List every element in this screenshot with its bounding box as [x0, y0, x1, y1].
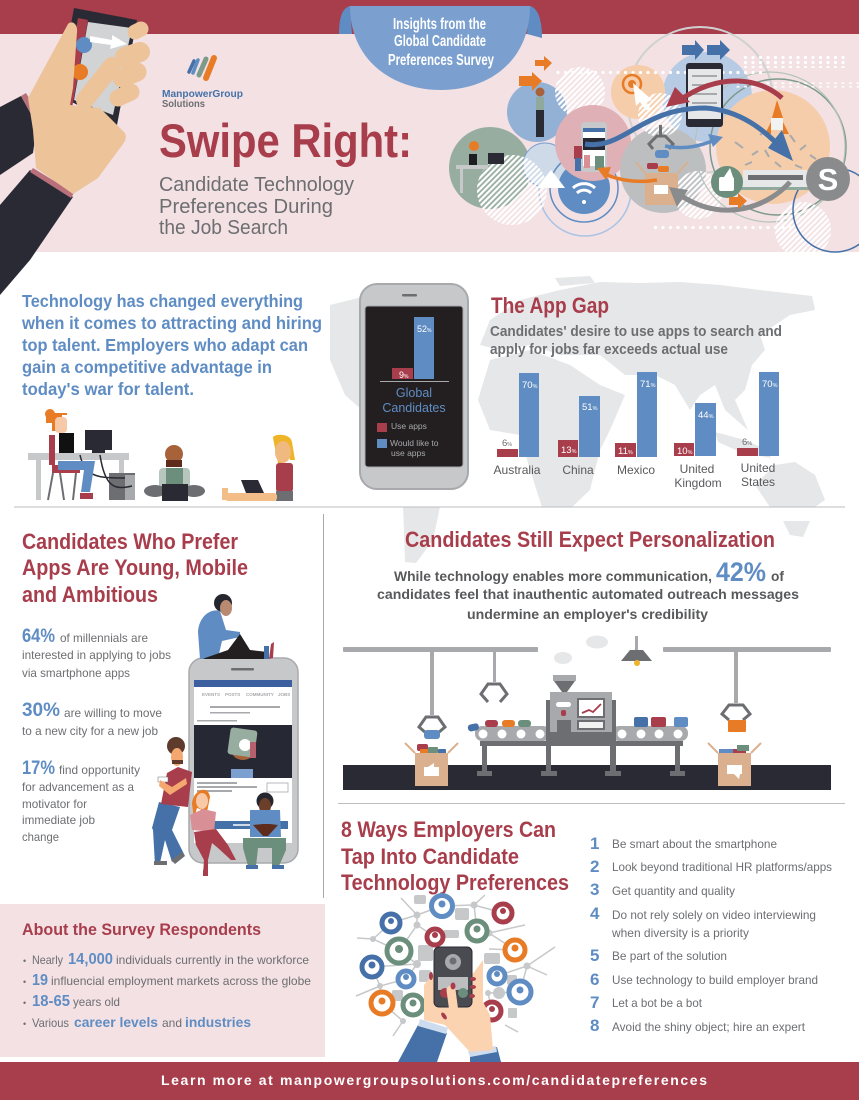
about bullets: career levels	[74, 1014, 158, 1030]
stat: 30 percent: are willing to move	[64, 706, 162, 720]
about bullets: years old	[73, 995, 120, 1009]
eight ways list: 8	[590, 1016, 599, 1035]
logo: Solutions	[162, 98, 205, 110]
country bar chart: 6%	[502, 438, 512, 449]
eight ways heading	[341, 817, 569, 895]
large phone with global chart	[360, 284, 468, 489]
message bubbles on belt	[467, 717, 688, 732]
eight ways list: Be part of the solution	[612, 949, 727, 963]
country bar chart: China	[562, 463, 594, 477]
smartphone with candidates: EVENTS	[202, 692, 220, 697]
icon: claw and box	[636, 125, 688, 205]
about the survey panel	[0, 904, 325, 1057]
man leaning	[152, 737, 192, 865]
about bullets: 14,000	[68, 951, 113, 968]
intro text: when it comes to attracting and hiring	[21, 313, 322, 333]
icon: S circle: S	[818, 162, 838, 197]
young mobile heading: and Ambitious	[22, 582, 158, 607]
stat: 17 percent: find opportunity	[59, 763, 140, 777]
app gap description: apply for jobs far exceeds actual use	[490, 342, 728, 358]
personalization text: 42%	[716, 557, 766, 587]
eight ways list	[590, 834, 832, 1035]
eight ways heading: 8 Ways Employers Can	[341, 817, 556, 842]
app gap heading: The App Gap	[491, 293, 609, 318]
intro text: Technology has changed everything	[22, 291, 303, 311]
icon: S circle	[806, 157, 850, 201]
about bullets: and	[162, 1016, 182, 1030]
eight ways list: Do not rely solely on video interviewing	[612, 908, 816, 922]
about bullets	[23, 951, 311, 1030]
icon: standing woman	[536, 88, 544, 137]
country bar chart: Kingdom	[674, 476, 722, 490]
eight ways list: when diversity is a priority	[611, 926, 749, 940]
eight ways list: Get quantity and quality	[612, 884, 735, 898]
eight ways list: 4	[590, 904, 600, 923]
chart legend: use apps	[391, 448, 426, 458]
country bar chart: States	[741, 475, 775, 489]
chart legend	[377, 421, 439, 458]
stat: 30 percent	[22, 700, 162, 738]
about bullets: industries	[185, 1014, 251, 1030]
footer	[0, 1062, 859, 1100]
young mobile heading: Apps Are Young, Mobile	[22, 555, 248, 580]
intro text: top talent. Employers who adapt can	[22, 335, 308, 355]
people using technology	[28, 409, 295, 501]
stat: 17 percent: motivator for	[22, 797, 87, 811]
subtitle: Candidate Technology	[159, 174, 354, 196]
stat: 30 percent: 30%	[22, 700, 60, 721]
header collage of circles and arrows	[449, 27, 859, 258]
stat: 17 percent	[22, 758, 140, 844]
country bar chart: 44%	[698, 410, 714, 421]
personalization text: candidates feel that inauthentic automated outreach messages	[377, 586, 799, 602]
eight ways list: 6	[590, 970, 599, 989]
stat: 64 percent: interested in applying to jobs	[22, 648, 171, 662]
about bullets: •	[23, 998, 26, 1008]
debris and keyboard	[735, 131, 816, 190]
world map background	[330, 276, 825, 563]
about bullets: individuals currently in the workforce	[116, 953, 309, 967]
survey ribbon badge: Insights from the	[393, 16, 486, 33]
about bullets: Various	[32, 1016, 69, 1030]
country bar chart: 11%	[618, 446, 633, 457]
eight ways list: Use technology to build employer brand	[612, 973, 818, 987]
global bar chart	[380, 317, 449, 382]
about bullets: 19	[32, 972, 48, 989]
footer: Learn more at manpowergroupsolutions.com/candidatepreferences	[161, 1072, 707, 1088]
smartphone with candidates	[152, 594, 298, 876]
country bar chart: 6%	[742, 437, 752, 448]
icon: cursor click	[623, 75, 652, 110]
chart legend: Use apps	[391, 421, 427, 431]
about bullets: influencial employment markets across the globe	[51, 974, 311, 988]
conveyor machine	[475, 675, 688, 776]
country bar chart: Mexico	[617, 463, 655, 477]
app gap description: Candidates' desire to use apps to search and	[490, 324, 782, 340]
survey ribbon badge	[339, 6, 542, 90]
middle claw	[481, 652, 507, 702]
personalization text: of	[771, 568, 784, 584]
eight ways list: Let a bot be a bot	[612, 996, 703, 1010]
eight ways list: 5	[590, 946, 599, 965]
about bullets: •	[23, 1019, 26, 1029]
curved arrows	[585, 81, 793, 210]
country bar chart: 13%	[561, 445, 577, 456]
country bar chart: United	[741, 461, 775, 475]
survey ribbon badge: Global Candidate	[394, 33, 486, 50]
intro text: gain a competitive advantage in	[22, 357, 272, 377]
eight ways heading: Tap Into Candidate	[341, 844, 519, 869]
eight ways list: 3	[590, 880, 599, 899]
person sitting on phone	[198, 594, 274, 659]
personalization text: undermine an employer's credibility	[467, 606, 708, 622]
eight ways list: Look beyond traditional HR platforms/apps	[612, 860, 832, 874]
about bullets: 18-65	[32, 993, 70, 1010]
eight ways list: 1	[590, 834, 599, 853]
subtitle: the Job Search	[159, 217, 288, 239]
global candidates label	[382, 386, 446, 415]
global candidates label: Global	[396, 386, 432, 400]
global candidates label: Candidates	[382, 401, 446, 415]
young mobile heading	[22, 529, 248, 607]
icon: thumbs up circle	[711, 166, 743, 198]
about bullets: •	[23, 956, 26, 966]
icon: wifi	[573, 184, 595, 204]
about bullets: •	[23, 977, 26, 987]
smartphone with candidates: COMMUNITY	[246, 692, 274, 697]
icon: tablet	[686, 63, 723, 127]
straight arrows	[519, 40, 747, 209]
stat: 17 percent: immediate job	[22, 813, 95, 827]
right claw and box	[708, 652, 761, 786]
global bar chart: 52%	[417, 324, 432, 334]
country bar chart: 70%	[762, 379, 778, 390]
country bar chart: 51%	[582, 402, 598, 413]
title: Swipe Right:	[159, 114, 412, 167]
stat: 64 percent	[22, 626, 171, 680]
icon: rocket	[765, 100, 789, 134]
country bar chart: Australia	[494, 463, 541, 477]
personalization heading: Candidates Still Expect Personalization	[405, 527, 775, 552]
about heading: About the Survey Respondents	[22, 920, 261, 939]
stat: 64 percent: 64%	[22, 626, 55, 647]
icon: mini phone with people	[574, 122, 607, 172]
subtitle	[159, 174, 354, 239]
chart legend: Would like to	[390, 438, 439, 448]
factory conveyor illustration	[343, 636, 831, 790]
stat: 64 percent: of millennials are	[60, 631, 148, 645]
stat: 64 percent: via smartphone apps	[22, 666, 130, 680]
personalization text: While technology enables more communication,	[394, 568, 712, 584]
logo: ManpowerGroup	[162, 88, 243, 100]
hanging lamp	[621, 636, 652, 666]
intro text	[21, 291, 322, 399]
candidate network with hand and phone	[356, 895, 555, 1062]
hand holding phone	[0, 8, 141, 295]
eight ways list: 2	[590, 857, 599, 876]
left claw and box	[405, 652, 458, 786]
eight ways list: 7	[590, 993, 599, 1012]
eight ways list: Be smart about the smartphone	[612, 837, 777, 851]
survey ribbon badge: Preferences Survey	[388, 52, 494, 69]
global bar chart: 9%	[399, 370, 409, 380]
icon: seated woman at desk	[456, 141, 504, 193]
stat: 17 percent: 17%	[22, 758, 55, 779]
subtitle: Preferences During	[159, 196, 333, 218]
smoke clouds	[554, 636, 608, 664]
man sitting on phone base	[243, 792, 286, 869]
smartphone with candidates: POSTS	[225, 692, 240, 697]
stat: 17 percent: change	[22, 830, 59, 844]
country bar chart	[494, 372, 779, 490]
eight ways list: Avoid the shiny object; hire an expert	[612, 1020, 806, 1034]
smartphone with candidates: JOBS	[278, 692, 290, 697]
app gap description	[490, 324, 782, 358]
country bar chart: United	[680, 462, 714, 476]
country bar chart: 70%	[522, 380, 538, 391]
stat: 17 percent: for advancement as a	[22, 780, 134, 794]
personalization text	[377, 557, 799, 622]
stat: 30 percent: to a new city for a new job	[22, 724, 158, 738]
country bar chart: 71%	[640, 379, 656, 390]
intro text: today's war for talent.	[22, 379, 194, 399]
logo	[162, 58, 243, 110]
header band	[0, 0, 859, 252]
woman sitting	[190, 790, 236, 876]
about bullets: Nearly	[32, 953, 63, 967]
country bar chart: 10%	[677, 446, 693, 457]
young mobile heading: Candidates Who Prefer	[22, 529, 238, 554]
eight ways heading: Technology Preferences	[341, 870, 569, 895]
